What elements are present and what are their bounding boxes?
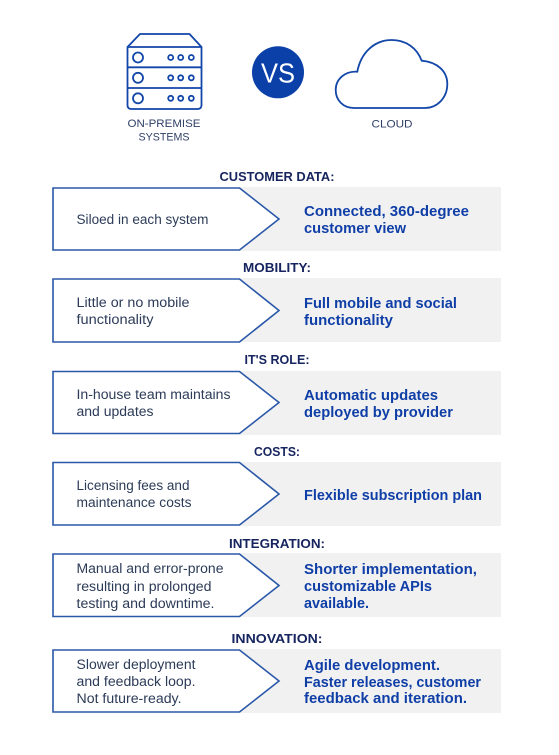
- text: cloud: customizable APIs: [304, 579, 432, 595]
- heading: INNOVATION:: [232, 632, 322, 646]
- text: cloud: Full mobile and social: [304, 296, 457, 312]
- text: on-premise: functionality: [76, 312, 154, 327]
- panel: cloud side background: [240, 462, 501, 526]
- text: on-premise: In-house team maintains: [76, 387, 231, 402]
- icon: server rack: [128, 34, 202, 109]
- text: cloud: Agile development.: [304, 658, 440, 674]
- icon: cloud: [336, 40, 447, 108]
- text: cloud: functionality: [304, 313, 393, 329]
- text: on-premise: [76, 295, 190, 327]
- header comparison: [128, 34, 447, 144]
- panel: on-premise arrow box: [53, 650, 279, 712]
- panel: on-premise arrow box: [53, 188, 279, 250]
- label: on-premise systems: ON-PREMISE: [128, 118, 200, 130]
- text: on-premise: Licensing fees and: [76, 478, 190, 493]
- text: cloud: [304, 562, 477, 612]
- text: cloud: available.: [304, 596, 369, 612]
- text: on-premise: resulting in prolonged: [76, 579, 212, 594]
- text: on-premise: Siloed in each system: [76, 212, 208, 227]
- text: cloud: feedback and iteration.: [304, 691, 467, 707]
- heading: COSTS:: [254, 445, 300, 459]
- text: on-premise: Slower deployment: [76, 657, 196, 672]
- section: mobility: [53, 261, 501, 342]
- panel: on-premise arrow box: [53, 372, 279, 434]
- text: on-premise: and feedback loop.: [76, 674, 196, 689]
- text: on-premise: [76, 657, 196, 706]
- heading: MOBILITY:: [243, 261, 311, 275]
- text: on-premise: [76, 561, 223, 611]
- text: on-premise: testing and downtime.: [76, 596, 214, 611]
- label: on-premise systems: SYSTEMS: [138, 132, 190, 144]
- panel: cloud side background: [240, 278, 501, 342]
- label: on-premise systems: [128, 118, 200, 144]
- panel: on-premise arrow box: [53, 554, 279, 616]
- panel: on-premise arrow box: [53, 462, 279, 525]
- panel: on-premise arrow box: [53, 279, 279, 342]
- section: IT's role: [53, 353, 501, 435]
- text: cloud: Flexible subscription plan: [304, 488, 482, 504]
- panel: cloud side background: [240, 187, 501, 251]
- text: on-premise: [76, 478, 192, 510]
- text: cloud: [304, 388, 453, 421]
- section: customer data: [53, 170, 501, 251]
- text: cloud: Automatic updates: [304, 388, 438, 404]
- heading: INTEGRATION:: [229, 537, 325, 551]
- text: cloud: Connected, 360-degree: [304, 204, 469, 220]
- text: on-premise: Not future-ready.: [76, 691, 182, 706]
- section: innovation: [53, 632, 501, 713]
- text: on-premise: maintenance costs: [76, 495, 192, 510]
- label: cloud: CLOUD: [372, 119, 412, 131]
- text: on-premise: Manual and error-prone: [76, 561, 223, 576]
- panel: cloud side background: [240, 371, 501, 435]
- icon: VS badge: [252, 46, 304, 98]
- panel: cloud side background: [240, 553, 501, 617]
- heading: CUSTOMER DATA:: [220, 170, 334, 184]
- heading: IT'S ROLE:: [244, 353, 310, 367]
- section: costs: [53, 445, 501, 526]
- text: on-premise: and updates: [76, 404, 154, 419]
- text: cloud: [304, 658, 481, 707]
- icon: VS badge: VS: [261, 58, 295, 88]
- text: cloud: [304, 204, 469, 237]
- text: cloud: deployed by provider: [304, 405, 453, 421]
- section: integration: [53, 537, 501, 617]
- text: cloud: [304, 296, 457, 329]
- text: cloud: Faster releases, customer: [304, 675, 481, 691]
- text: on-premise: [76, 387, 231, 419]
- panel: cloud side background: [240, 649, 501, 713]
- text: on-premise: Little or no mobile: [76, 295, 190, 310]
- text: cloud: customer view: [304, 221, 407, 237]
- text: cloud: Shorter implementation,: [304, 562, 477, 578]
